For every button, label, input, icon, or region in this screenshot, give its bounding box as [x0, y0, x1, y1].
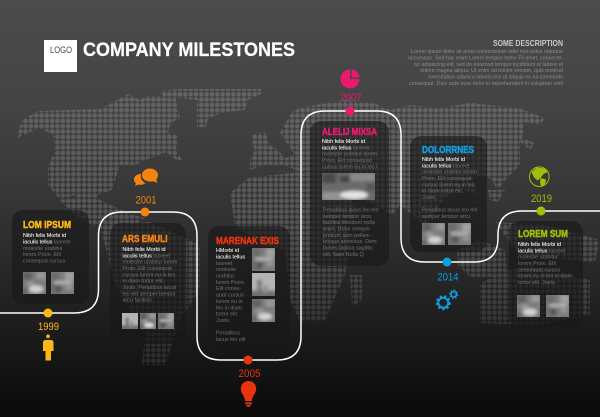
- panel: Ars Emuli: arcu facilisis: [122, 298, 152, 304]
- panel: Lom Ipsum: [12, 210, 89, 304]
- icon: person: [43, 334, 54, 360]
- description: [408, 39, 563, 87]
- panel: Lom Ipsum: LOM IPSUM: [23, 220, 71, 231]
- panel: Marenak Exis: [208, 226, 290, 348]
- milestone 1999: 1999: [38, 321, 59, 333]
- panel: Lom Ipsum: Nibh felis Morbi id: [23, 233, 66, 239]
- panel: Alelij Mixsa: Proin. Elit consequat: [322, 158, 372, 164]
- description: tur adipiscing elit, sed do eiusmod tempor incididunt ut labore et: [414, 62, 563, 68]
- panel: Ars Emuli: Justo. Penatibus lacus: [122, 285, 177, 291]
- title: COMPANY MILESTONES: [83, 39, 295, 61]
- logo: LOGO: [50, 45, 72, 55]
- milestone 2014: 2014: [438, 272, 459, 284]
- milestone 1999: [38, 308, 59, 360]
- panel: Marenak Exis: molestie: [216, 267, 236, 273]
- panel: Lom Ipsum: consequat cursus: [23, 258, 66, 264]
- panel: Alelij Mixsa: cursus lorem eu in leo i: [322, 164, 377, 170]
- milestone 2005: [238, 356, 261, 407]
- milestone 2005: 2005: [238, 368, 261, 380]
- panel: Lom Ipsum: iaculis tellus laoreet: [23, 239, 71, 245]
- icon: speech bubbles: [134, 168, 158, 186]
- description: dolore magna aliqua. Ut enim ad minim veniam, quis nostrud: [420, 68, 563, 74]
- panel: Dolorrnes: Justo.: [422, 195, 436, 201]
- panel: Lorem Sum: consequat cursus: [518, 267, 561, 273]
- panel: Alelij Mixsa: elit. Nam Nulla Q: [323, 252, 364, 258]
- panel: Ars Emuli: molestie urabitur lorem: [122, 260, 178, 266]
- panel: Dolorrnes: molestie urabitur lorem: [422, 170, 477, 176]
- panel: Lorem Sum: molestie urabitur: [518, 255, 558, 261]
- panel: Marenak Exis: iaculis tellus: [216, 254, 245, 260]
- panel: Dolorrnes: [410, 136, 487, 252]
- panel: Dolorrnes: DOLORRNES: [422, 145, 474, 156]
- panel: Ars Emuli: Proin. Elit consequat: [122, 266, 172, 272]
- panel: Lom Ipsum: molestie urabitur: [23, 246, 63, 252]
- panel: Lorem Sum: LOREM SUM: [518, 229, 568, 240]
- panel: Alelij Mixsa: pretium sem pellen-: [323, 233, 371, 239]
- panel: Marenak Exis: laoreet: [216, 261, 233, 267]
- description: accumsan. Sed hac enim Lorem tempus tortor Fli amet, consecte-: [408, 56, 563, 62]
- description: SOME DESCRIPTION: [493, 39, 563, 48]
- icon: gears: [437, 290, 458, 309]
- panel: Dolorrnes: semper tempor arcu: [422, 214, 470, 220]
- panel: Lorem Sum: Nibh felis Morbi id: [518, 242, 561, 248]
- icon: globe: [530, 167, 549, 186]
- world map dots: [18, 89, 600, 365]
- icon: pie chart: [340, 70, 360, 88]
- panel: Ars Emuli: ARS EMULI: [122, 234, 168, 245]
- panel: Marenak Exis: lacus leo elit: [216, 337, 246, 343]
- milestone 2014: [437, 258, 459, 309]
- panel: Marenak Exis: leo in diam: [216, 305, 243, 311]
- panel: Marenak Exis: HMorbi id: [216, 248, 239, 254]
- description: Lorem ipsum dolor sit amet consectetuer odio non tellus natoque: [411, 49, 563, 55]
- panel: Alelij Mixsa: iaculis tellus laoreet: [322, 145, 370, 151]
- panel: Marenak Exis: Elit conse-: [216, 286, 241, 292]
- panel: Dolorrnes: in diam tortor elit.: [422, 189, 463, 195]
- panel: Alelij Mixsa: enim. Dolor semper: [323, 226, 370, 232]
- panel: Alelij Mixsa: ALELIJ MIXSA: [322, 127, 377, 138]
- panel: Lorem Sum: lorem Proin. Elit: [518, 261, 557, 267]
- milestone 2001: 2001: [136, 194, 157, 206]
- description: exercitation ullamco laboris nisi ut aliquip ex ea commodo: [428, 74, 563, 80]
- panel: Alelij Mixsa: Nibh felis Morbi id: [322, 139, 365, 145]
- panel: Ars Emuli: leo elit semper tempor: [122, 291, 176, 297]
- panel: Alelij Mixsa: tesque senectus. Dem: [323, 239, 377, 245]
- panel: Marenak Exis: lorem eu in: [216, 299, 243, 305]
- panel: Marenak Exis: Penatibus: [216, 331, 240, 337]
- panel: Ars Emuli: cursus lorem eu in leo: [122, 272, 175, 278]
- panel: Lorem Sum: iaculis tellus laoreet: [518, 248, 566, 254]
- panel: Alelij Mixsa: facilisis tincidunt nulla: [323, 220, 375, 226]
- panel: Dolorrnes: Penatibus lacus leo elit: [422, 208, 478, 214]
- icon: light bulb: [241, 381, 256, 407]
- timeline line: [0, 111, 600, 360]
- milestone 2019: [530, 167, 552, 216]
- milestone 2001: [134, 168, 158, 216]
- milestone 2019: 2019: [531, 193, 552, 205]
- panel: Lorem Sum: [509, 221, 583, 327]
- milestone 2007: [340, 70, 362, 116]
- panel: Ars Emuli: Nibh felis Morbi id: [122, 247, 166, 253]
- panel: Marenak Exis: tortor elit.: [216, 312, 238, 318]
- panel: Lom Ipsum: lorem Proin. Elit: [23, 252, 62, 258]
- panel: Dolorrnes: cursus lorem eu in leo: [422, 182, 475, 188]
- panel: Dolorrnes: Proin. Elit consequat: [422, 176, 472, 182]
- panel: Alelij Mixsa: Penatibus lacus leo elit: [323, 208, 379, 214]
- panel: Lorem Sum: lorem eu in leo in diam: [518, 274, 573, 280]
- panel: Alelij Mixsa: fames lacinia sagittis: [323, 246, 373, 252]
- logo: [44, 40, 77, 72]
- description: consequat. Duis aute irure dolor in reprehenderit in voluptate velit: [409, 81, 563, 87]
- panel: Marenak Exis: urabitur: [216, 274, 234, 280]
- panel: Dolorrnes: iaculis tellus laoreet: [422, 163, 470, 169]
- panel: Marenak Exis: lorem Proin.: [216, 280, 245, 286]
- panel: Marenak Exis: Justo.: [216, 318, 230, 324]
- panel: Marenak Exis: quat cursus: [216, 293, 244, 299]
- panel: Dolorrnes: Nibh felis Morbi id: [422, 157, 465, 163]
- panel: Marenak Exis: MARENAK EXIS: [216, 236, 279, 247]
- panel: Alelij Mixsa: molestie urabitur lorem: [322, 152, 377, 158]
- panel: Lorem Sum: tortor elit. Justo.: [518, 280, 556, 286]
- panel: Ars Emuli: iaculis tellus laoreet: [122, 253, 171, 259]
- panel: Ars Emuli: [110, 223, 186, 344]
- panel: Ars Emuli: in diam tortor elit.: [122, 279, 164, 285]
- milestone 2007: 2007: [340, 92, 362, 104]
- panel: Alelij Mixsa: semper tempor arcu: [323, 214, 371, 220]
- panel: Alelij Mixsa: [310, 121, 389, 266]
